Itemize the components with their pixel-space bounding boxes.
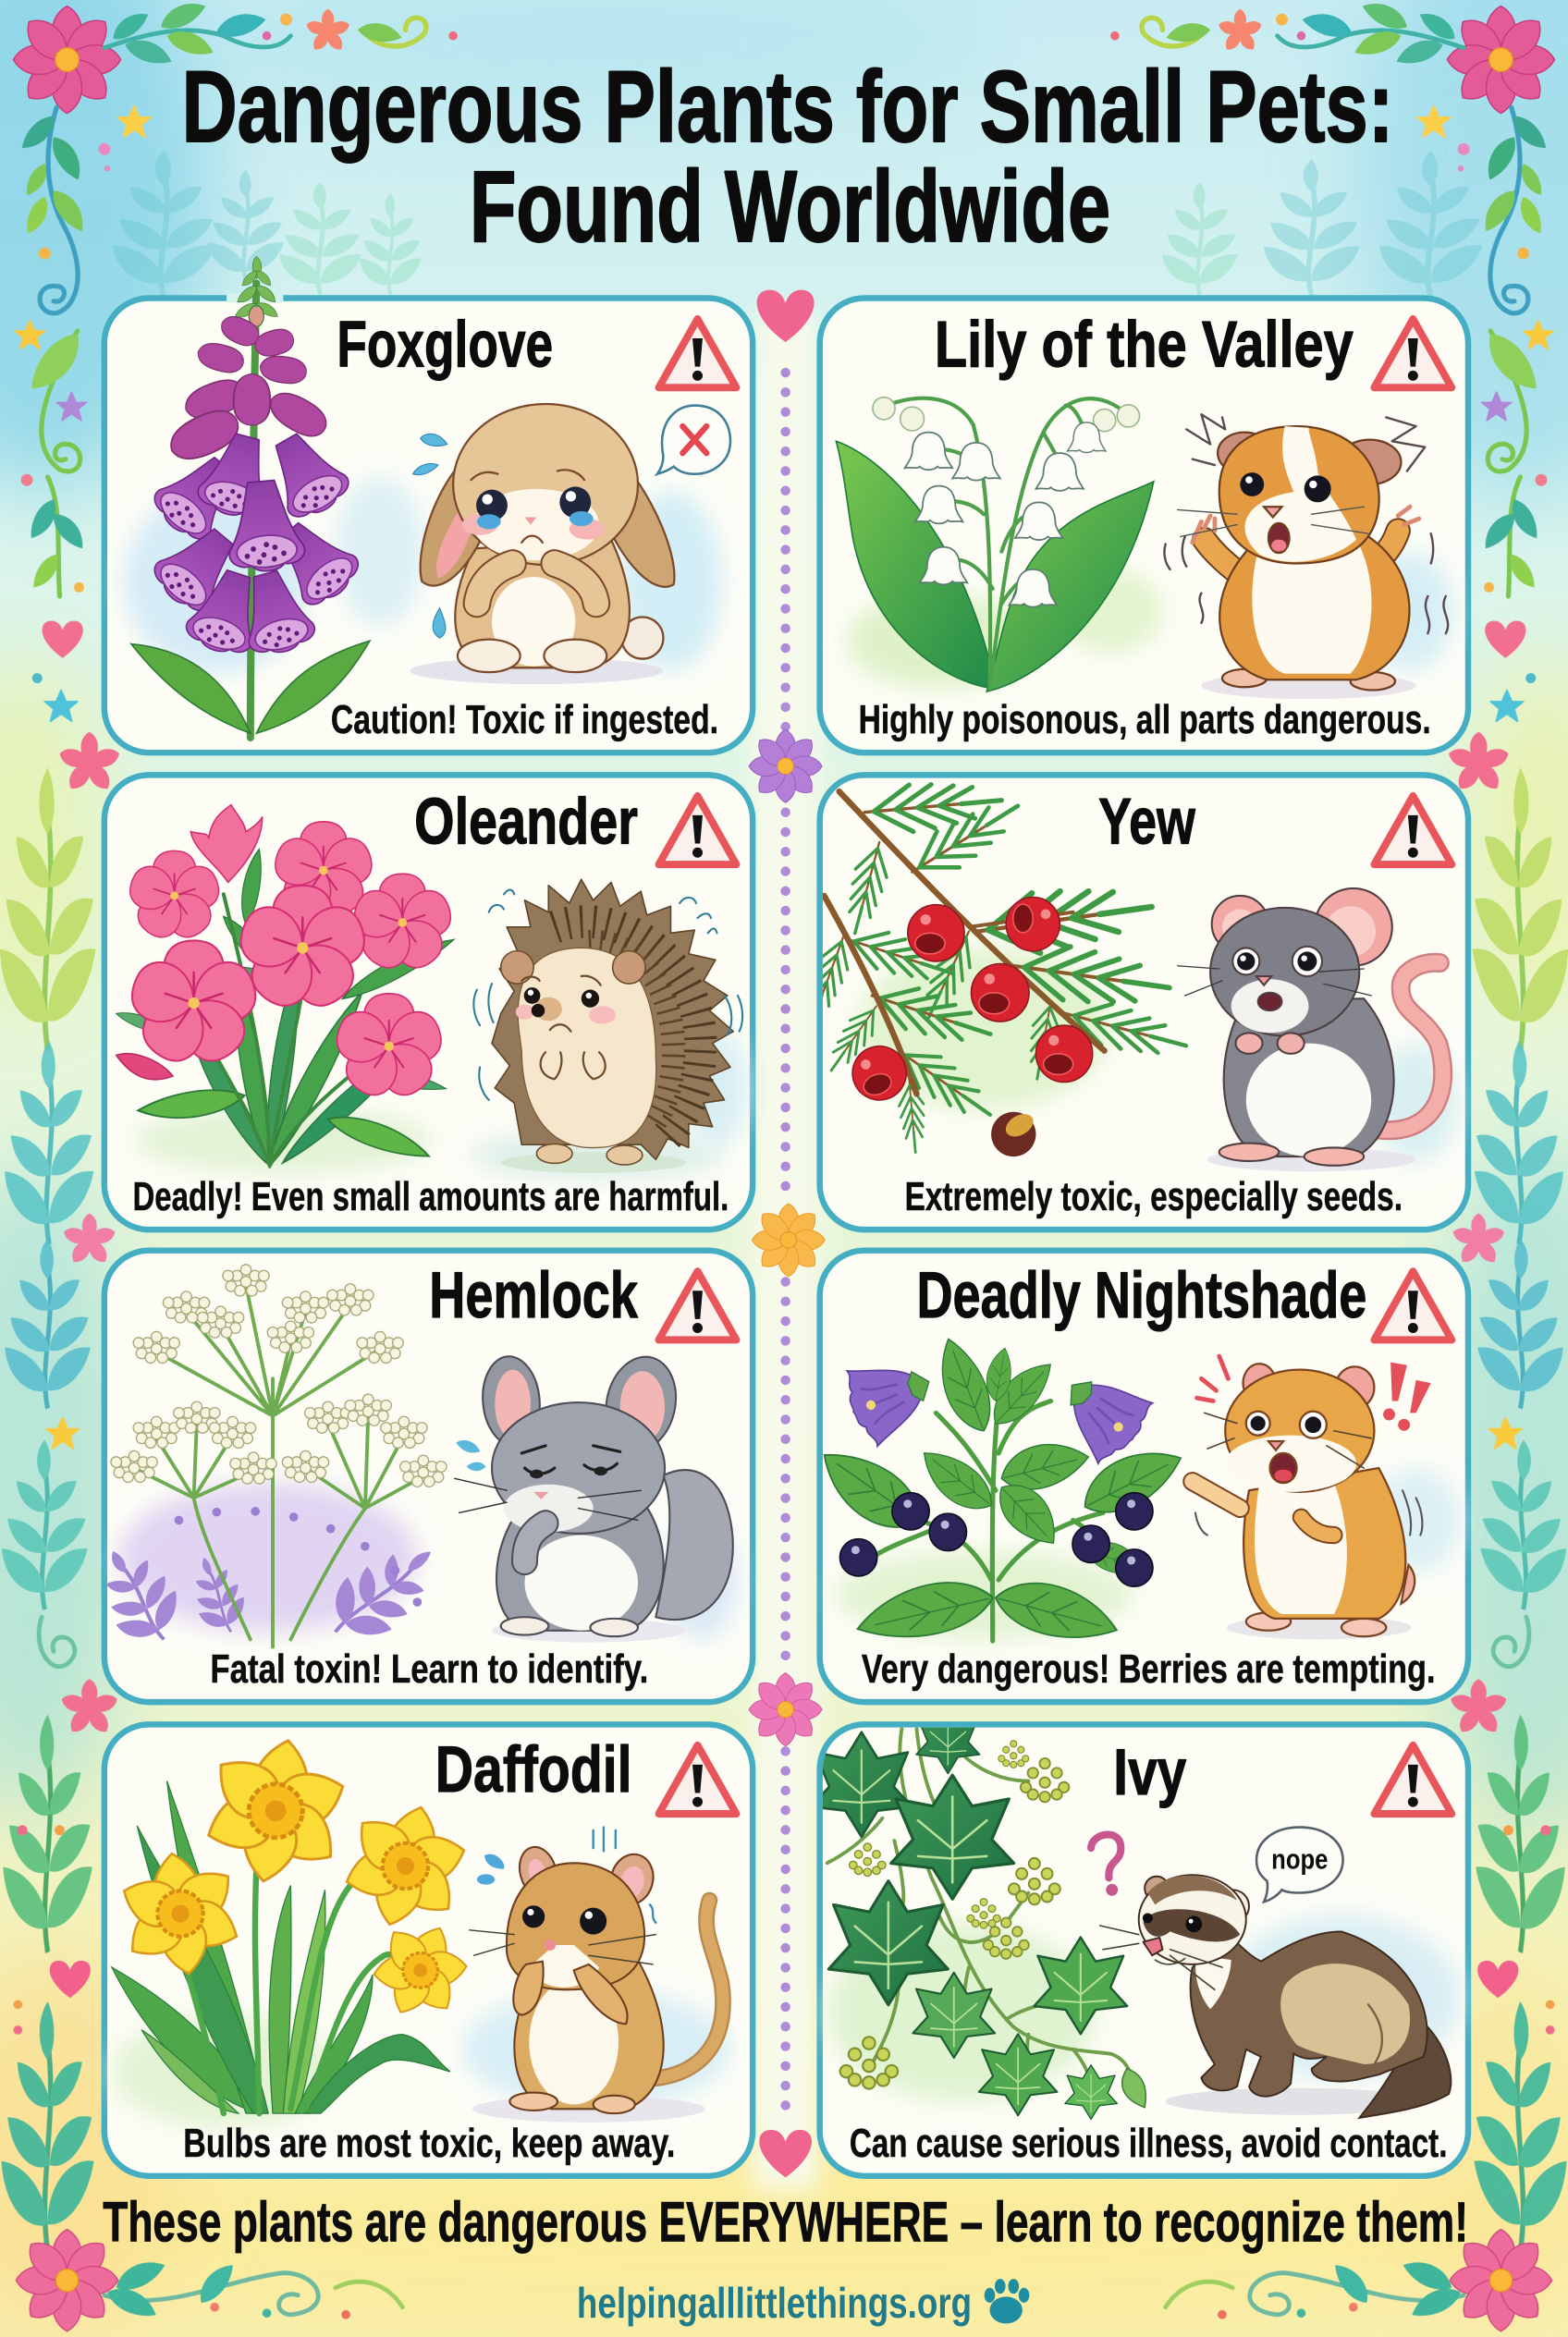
nightshade plant [808, 1332, 1191, 1652]
icon: paw [985, 2279, 1029, 2323]
icon: heart bottom [759, 2130, 812, 2177]
warning icon [659, 319, 736, 387]
gerbil [470, 1842, 723, 2123]
icon: orange flower [752, 1204, 825, 1277]
panel: yew [799, 775, 1468, 1230]
warning icon [1374, 319, 1452, 387]
yew branch [799, 777, 1192, 1165]
warning icon [1374, 1271, 1452, 1340]
warning icon [659, 1745, 736, 1814]
lavender sprigs [78, 1521, 456, 1662]
caption: Bulbs are most toxic, keep away. [183, 2122, 675, 2166]
hamster [1193, 1364, 1415, 1639]
heading: Foxglove [337, 309, 553, 382]
lily plant [836, 398, 1154, 691]
side flower pink [57, 732, 122, 793]
panel: daffodil [104, 1724, 753, 2176]
daffodil plant [109, 1728, 484, 2113]
exclamation marks [1383, 1363, 1431, 1431]
ivy plant [811, 1707, 1145, 2119]
heading: Yew [1098, 786, 1196, 859]
panel: deadly nightshade [808, 1251, 1468, 1702]
panel: ivy [811, 1707, 1468, 2176]
caption: Caution! Toxic if ingested. [331, 698, 718, 742]
panel: lily of the valley [820, 298, 1468, 752]
corner flower top [14, 6, 121, 114]
panel: oleander [104, 775, 753, 1230]
speech bubble nope [1256, 1828, 1343, 1902]
speech bubble with cross [657, 406, 730, 474]
title: Found Worldwide [470, 151, 1110, 263]
guinea pig [1178, 426, 1419, 699]
shock marks [1164, 414, 1448, 633]
ferret [1100, 1875, 1451, 2118]
rat [1178, 888, 1443, 1171]
caption: Fatal toxin! Learn to identify. [210, 1647, 648, 1692]
icon: heart top [757, 290, 815, 342]
warning icon [659, 796, 736, 864]
top vine [40, 107, 78, 313]
warning icon [659, 1271, 736, 1340]
caption: Extremely toxic, especially seeds. [905, 1175, 1403, 1219]
chinchilla [455, 1351, 733, 1643]
second vine [42, 331, 80, 596]
worry marks [473, 890, 742, 1100]
panel: hemlock [78, 1251, 753, 1702]
drops [456, 1440, 486, 1471]
heading: Hemlock [429, 1259, 638, 1332]
floral border left [0, 0, 458, 2331]
background plant silhouettes [103, 151, 1489, 298]
icon: pink flower [749, 1673, 822, 1746]
heading: Lily of the Valley [935, 309, 1354, 382]
hemlock plant [111, 1265, 447, 1647]
yew seed [983, 1104, 1044, 1165]
floral border right [1110, 0, 1568, 2331]
website credit: helpingalllittlethings.org [577, 2279, 972, 2327]
rabbit [410, 404, 674, 684]
speech bubble nope: nope [1271, 1844, 1328, 1876]
heading: Oleander [414, 786, 638, 859]
corner flower bottom [16, 2230, 118, 2331]
warning icon [1374, 1745, 1452, 1814]
drops and stress lines [477, 1828, 655, 1923]
center dotted divider [757, 290, 815, 2116]
caption: Deadly! Even small amounts are harmful. [132, 1175, 729, 1219]
heading: Ivy [1113, 1736, 1187, 1809]
warning icon [1374, 796, 1452, 864]
title [182, 51, 1393, 263]
panel: foxglove [104, 256, 753, 752]
icon: purple flower [749, 729, 822, 802]
heading: Daffodil [435, 1733, 632, 1806]
question mark [1091, 1835, 1121, 1896]
tear drops [413, 434, 447, 638]
foxglove plant [131, 256, 370, 738]
hedgehog [492, 879, 733, 1173]
oleander plant [115, 805, 457, 1171]
heading: Deadly Nightshade [916, 1259, 1366, 1332]
